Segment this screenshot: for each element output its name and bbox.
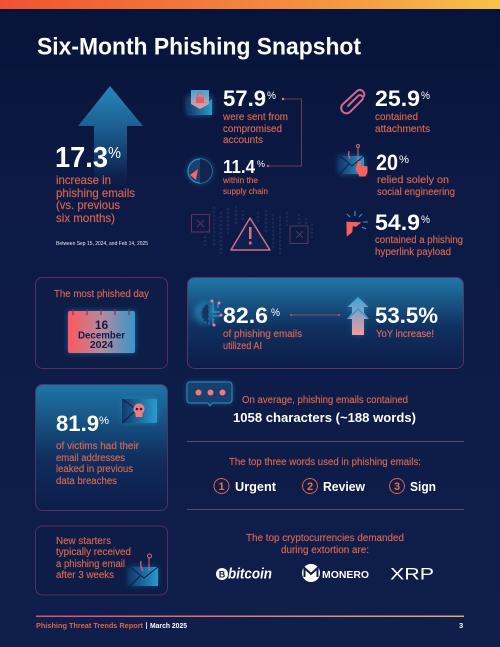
number: 82.6%: 82.6: [223, 303, 268, 328]
stat: 20% social engineering: [339, 144, 455, 198]
word 2: Review: [302, 478, 365, 494]
text: leaked addresses: of victims had their: [56, 441, 140, 452]
text: supply chain: [222, 175, 268, 196]
footer: [36, 616, 464, 630]
stat: 17.3% increase: [55, 86, 148, 247]
text: new starters: a phishing email: [56, 559, 125, 570]
number: 57.9%: 57.9: [223, 86, 266, 111]
icon: envelope with skull: [122, 399, 157, 423]
text: leaked addresses: email addresses: [56, 453, 125, 464]
icon: envelope with hook: [129, 554, 158, 586]
text: leaked addresses: data breaches: [56, 476, 117, 487]
text: compromised accounts: were sent from: [222, 112, 288, 123]
text: leaked addresses: [56, 441, 140, 487]
text: AI usage: of phishing emails: [223, 329, 302, 340]
text: YoY increase: YoY increase!: [376, 329, 434, 340]
text: new starters: New starters: [56, 536, 111, 547]
top gradient bar: [0, 0, 500, 9]
word 2: Review: 2: [307, 481, 313, 493]
page number: 3: [459, 621, 463, 630]
text: new starters: [56, 536, 131, 581]
text: new starters: typically received: [56, 547, 131, 558]
number: 17.3%: %: [108, 145, 121, 162]
section: cryptocurrencies: [216, 533, 434, 584]
number: 81.9%: 81.9: [56, 411, 99, 436]
number: 11.4%: 11.4: [223, 157, 255, 177]
panel: most phished day: [36, 278, 168, 368]
number: 81.9%: %: [99, 415, 109, 427]
text: supply chain: supply chain: [223, 186, 268, 196]
text: compromised accounts: [222, 112, 288, 146]
icon: up arrow: [78, 86, 143, 192]
stat: 57.9% compromised accounts: [187, 86, 288, 146]
icon: AI gear circuit: [194, 300, 222, 326]
text: leaked addresses: leaked in previous: [56, 464, 133, 475]
icon: double up arrow: [347, 297, 369, 335]
footer report name: Phishing Threat Trends Report: [36, 621, 143, 630]
text: social engineering: relied solely on: [377, 175, 449, 186]
text: AI usage: utilized AI: [223, 341, 262, 352]
text: social engineering: social engineering: [377, 187, 455, 198]
panel: AI usage: [188, 278, 464, 368]
stat: 54.9% hyperlink payload: [345, 210, 463, 258]
number: 11.4%: %: [257, 159, 266, 170]
icon: paperclip: [341, 90, 364, 113]
text: attachments: contained: [375, 112, 418, 123]
section: average email length: [187, 382, 416, 425]
text: compromised accounts: accounts: [223, 135, 263, 146]
icon: calendar: [68, 309, 135, 353]
heading: cryptocurrencies: during extortion are:: [281, 545, 369, 556]
text: increase description: increase in: [56, 173, 111, 187]
icon: calendar: 16: [95, 318, 108, 332]
icon: warning triangle with data matrix: [192, 206, 312, 256]
text: increase description: phishing emails: [56, 186, 135, 200]
connector between 57.9% and 11.4%: [267, 98, 302, 167]
icon: calendar: 2024: [90, 339, 113, 351]
word 3: Sign: [390, 478, 436, 494]
text: hyperlink payload: contained a phishing: [375, 235, 463, 246]
text: average label: On average, phishing emails contained: [242, 395, 408, 406]
text: characters count: 1058 characters (~188 words): [233, 411, 416, 425]
stat: 25.9% attachments: [341, 86, 430, 135]
panel: new starters: [36, 526, 168, 595]
icon: cursor click: [345, 211, 368, 237]
number: 20%: 20: [376, 150, 398, 175]
word 1: Urgent: [214, 478, 277, 494]
number: 17.3%: 17.3: [55, 142, 108, 174]
icon: envelope with hook and pointer: [339, 144, 368, 176]
logo: XRP: XRP: [390, 564, 434, 584]
title: Six-Month Phishing Snapshot: [37, 34, 361, 60]
icon: chat bubble: [187, 382, 232, 406]
number: 20%: %: [399, 154, 409, 166]
logo: bitcoin: B: [219, 570, 226, 580]
word 2: Review: Review: [323, 480, 365, 494]
text: social engineering: [377, 175, 455, 198]
text: AI usage: [223, 329, 302, 352]
text: hyperlink payload: hyperlink payload: [375, 247, 451, 258]
heading: most phished day: The most phished day: [54, 289, 149, 300]
panel: leaked addresses: [36, 384, 168, 510]
footer date: March 2025: [150, 623, 187, 630]
number: 54.9%: 54.9: [375, 210, 420, 235]
word 1: Urgent: 1: [218, 481, 225, 493]
number: 82.6%: %: [271, 307, 280, 319]
connector: [290, 314, 340, 316]
stat: 11.4% supply chain: [187, 157, 268, 196]
text: date range: Between Sep 15, 2024, and Feb 14, 2025: [56, 241, 148, 247]
text: compromised accounts: compromised: [223, 124, 282, 135]
logo: monero: MONERO: [322, 570, 369, 581]
logo: bitcoin: bitcoin: [228, 566, 272, 582]
heading: cryptocurrencies: [246, 533, 404, 556]
icon: envelope with lock: [187, 90, 212, 115]
number: 53.5%: 53.5%: [375, 303, 438, 328]
text: attachments: [375, 112, 430, 135]
section: top three words: [214, 457, 436, 494]
heading: top three words: The top three words used in phishing emails:: [229, 457, 421, 468]
text: new starters: after 3 weeks: [56, 570, 114, 581]
word 3: Sign: 3: [394, 481, 400, 493]
icon: calendar: December: [78, 330, 125, 342]
logo: monero: [302, 564, 369, 582]
icon: pie chart: [187, 158, 213, 184]
number: 25.9%: 25.9: [375, 86, 420, 111]
number: 57.9%: %: [267, 90, 276, 102]
text: attachments: attachments: [375, 124, 430, 135]
text: hyperlink payload: [375, 235, 463, 258]
text: increase description: [56, 173, 135, 225]
number: 54.9%: %: [421, 214, 430, 226]
text: increase description: (vs. previous: [56, 198, 120, 212]
word 1: Urgent: Urgent: [235, 480, 277, 494]
text: increase description: six months): [56, 211, 115, 225]
heading: cryptocurrencies: The top cryptocurrencies demanded: [246, 533, 404, 544]
word 3: Sign: Sign: [410, 480, 436, 494]
text: supply chain: within the: [222, 175, 258, 185]
number: 25.9%: %: [421, 90, 430, 102]
